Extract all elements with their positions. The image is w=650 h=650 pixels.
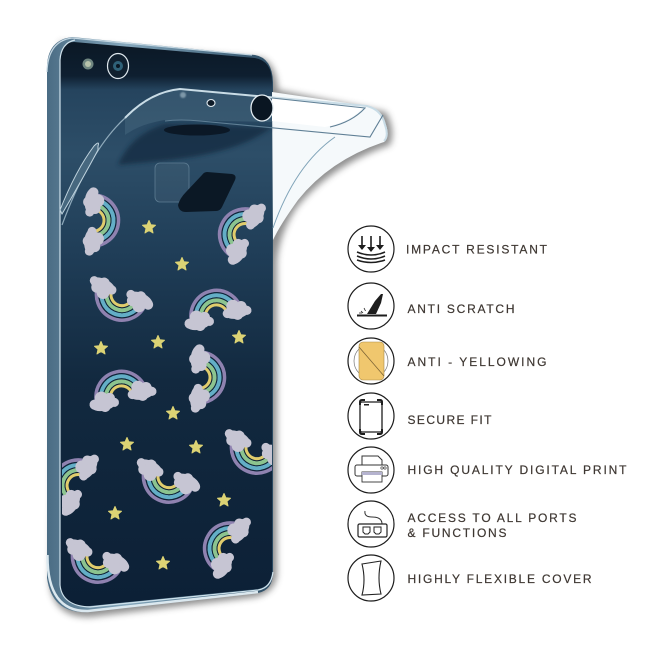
case side button	[60, 143, 98, 214]
phone with transparent case	[39, 37, 392, 617]
icon: arrows and layers	[348, 226, 394, 272]
lip highlight	[125, 89, 387, 141]
printed rainbows pattern	[62, 187, 272, 584]
label	[408, 511, 576, 540]
feature: access to all ports	[348, 501, 576, 547]
label: HIGHLY FLEXIBLE COVER	[408, 572, 592, 586]
case flap over white	[272, 92, 388, 240]
fingerprint square	[155, 163, 189, 202]
top edge highlight	[47, 38, 252, 72]
phone back panel	[60, 42, 272, 606]
icon: yellow case crossed	[348, 338, 394, 384]
fingerprint cutout	[178, 172, 236, 212]
flash	[82, 58, 94, 70]
left curve of case	[62, 118, 125, 225]
label: ACCESS TO ALL PORTS	[408, 511, 576, 525]
feature: anti scratch	[348, 283, 514, 329]
feature: high quality digital print	[348, 447, 627, 493]
camera hole	[251, 95, 273, 121]
icon: bent cover	[348, 555, 394, 601]
icon: fitted case	[348, 393, 394, 439]
icon: ports	[348, 501, 394, 547]
label: & FUNCTIONS	[408, 526, 506, 540]
frame highlights	[60, 40, 273, 607]
label: SECURE FIT	[408, 413, 492, 427]
small hole	[207, 100, 215, 106]
icon: printer	[348, 447, 394, 493]
label: HIGH QUALITY DIGITAL PRINT	[408, 463, 627, 477]
phone outer frame	[47, 37, 273, 612]
clear case bottom rim	[47, 555, 258, 611]
lighter lip band over phone	[125, 89, 272, 135]
glow dot	[180, 92, 186, 98]
camera lens	[108, 54, 128, 78]
label: ANTI SCRATCH	[408, 302, 514, 316]
case right curve	[273, 137, 335, 228]
case drop shadow	[50, 42, 392, 617]
icon: blade scratching	[348, 283, 394, 329]
label: ANTI - YELLOWING	[408, 355, 546, 369]
flap lip opening white	[272, 98, 364, 127]
label: IMPACT RESISTANT	[406, 242, 548, 256]
feature: highly flexible cover	[348, 555, 592, 601]
feature: secure fit	[348, 393, 492, 439]
feature: impact resistant	[348, 226, 548, 272]
feature: anti yellowing	[348, 338, 546, 384]
speaker slot	[164, 124, 230, 136]
lip second line	[165, 98, 383, 137]
shaded area under lip	[118, 124, 272, 165]
